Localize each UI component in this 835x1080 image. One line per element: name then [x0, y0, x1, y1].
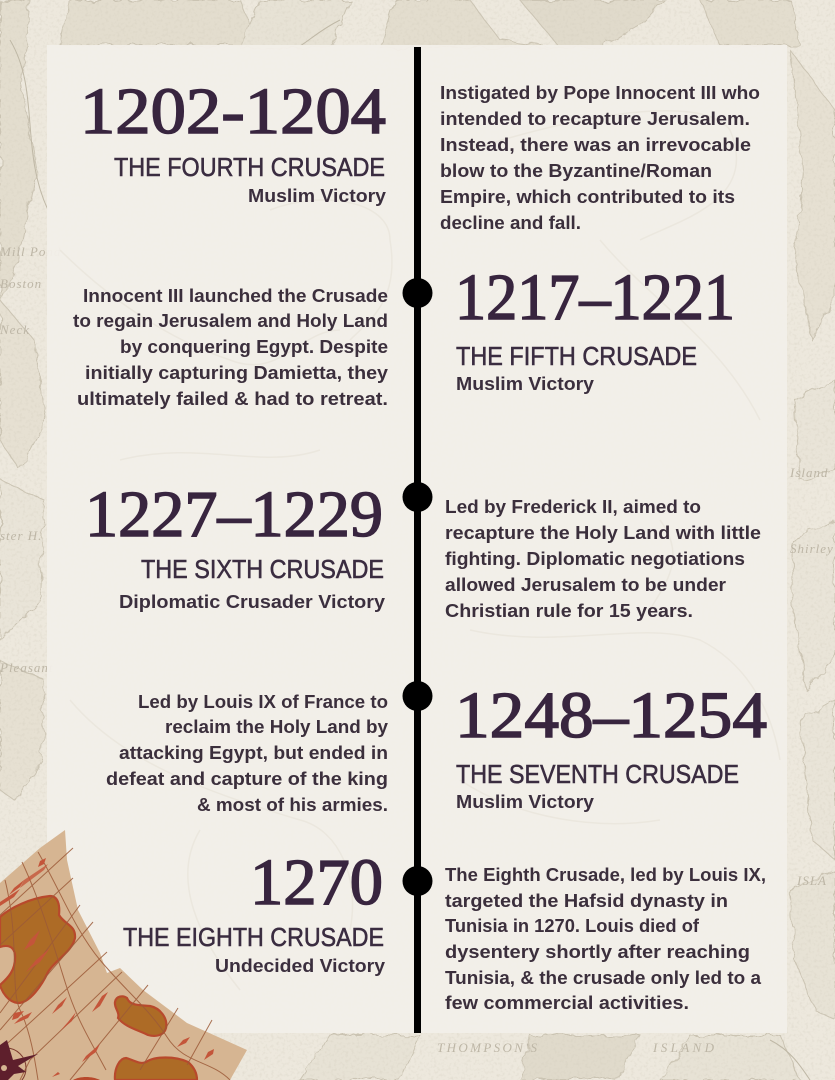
panel: eighth crusade heading [123, 846, 385, 976]
panel: sixth crusade heading [85, 478, 385, 612]
background: antique map: Island [789, 465, 828, 480]
text block: fourth crusade description: intended to recapture Jerusalem. [440, 109, 750, 129]
map landmass: lower island [115, 1058, 197, 1080]
text block: fifth crusade description: by conquering Egypt. Despite [120, 337, 388, 357]
map grid lines [0, 848, 230, 1080]
text block: eighth crusade description: targeted the Hafsid dynasty in [445, 891, 728, 911]
background: antique map: Boston [0, 276, 42, 291]
date: 1202-1204: 1202-1204 [80, 75, 386, 148]
text block: eighth crusade description [445, 865, 766, 1013]
outcome: diplomatic crusader victory: Diplomatic Crusader Victory [119, 592, 385, 612]
text block: fourth crusade description [440, 83, 760, 233]
text block: seventh crusade description [106, 692, 388, 815]
text block: sixth crusade description: recapture the Holy Land with little [445, 523, 761, 543]
text block: sixth crusade description: allowed Jerusalem to be under [445, 575, 726, 595]
text block: fifth crusade description: Innocent III launched the Crusade [83, 286, 388, 306]
text block: fourth crusade description: Instigated by Pope Innocent III who [440, 83, 760, 103]
text block: fourth crusade description: Instead, there was an irrevocable [440, 135, 751, 155]
outcome: muslim victory: Muslim Victory [456, 792, 594, 812]
heading: the fifth crusade: THE FIFTH CRUSADE [456, 341, 697, 371]
map landmass: large island [0, 896, 75, 1003]
text block: fifth crusade description: to regain Jerusalem and Holy Land [73, 311, 388, 331]
text block: eighth crusade description: The Eighth Crusade, led by Louis IX, [445, 865, 766, 885]
parchment sheet [0, 830, 247, 1080]
text block: fifth crusade description: ultimately failed & had to retreat. [77, 389, 388, 409]
date: 1227-1229: 1227–1229 [85, 478, 383, 551]
map red sea marks [0, 858, 214, 1077]
outcome: muslim victory: Muslim Victory [248, 186, 386, 206]
text block: fourth crusade description: blow to the Byzantine/Roman [440, 161, 712, 181]
text block: sixth crusade description: Led by Frederick II, aimed to [445, 497, 701, 517]
background: antique map: Neck [0, 322, 30, 337]
background: antique map: ster H. [0, 528, 42, 543]
background: antique map: ISLA [796, 873, 827, 888]
text block: eighth crusade description: Tunisia in 1270. Louis died of [445, 916, 700, 936]
text block: seventh crusade description: attacking Egypt, but ended in [119, 743, 388, 763]
panel: seventh crusade heading [455, 679, 767, 812]
text block: sixth crusade description: fighting. Diplomatic negotiations [445, 549, 745, 569]
text block: sixth crusade description: Christian rule for 15 years. [445, 601, 693, 621]
illustration: parchment map corner [0, 830, 247, 1080]
date: 1270: 1270 [250, 846, 383, 919]
date: 1248-1254: 1248–1254 [455, 679, 767, 752]
text block: fifth crusade description: initially capturing Damietta, they [85, 363, 388, 383]
heading: the eighth crusade: THE EIGHTH CRUSADE [123, 922, 384, 952]
background: antique map: ISLAND [652, 1040, 715, 1055]
timeline: vertical line with markers [402, 47, 432, 1033]
heading: the seventh crusade: THE SEVENTH CRUSADE [456, 759, 739, 789]
text block: fourth crusade description: decline and fall. [440, 213, 581, 233]
map landmass: small island [115, 996, 166, 1036]
outcome: muslim victory: Muslim Victory [456, 374, 594, 394]
panel: fifth crusade heading [455, 261, 735, 394]
text block: seventh crusade description: Led by Louis IX of France to [138, 692, 388, 712]
outcome: undecided victory: Undecided Victory [215, 956, 385, 976]
text block: eighth crusade description: few commercial activities. [445, 993, 689, 1013]
heading: the sixth crusade: THE SIXTH CRUSADE [141, 554, 384, 584]
background: antique map: Pleasant [0, 660, 54, 675]
icon: compass rose [0, 1040, 38, 1080]
heading: the fourth crusade: THE FOURTH CRUSADE [114, 152, 385, 182]
text block: seventh crusade description: & most of his armies. [197, 795, 388, 815]
text block: seventh crusade description: reclaim the Holy Land by [165, 717, 388, 737]
text block: eighth crusade description: dysentery shortly after reaching [445, 942, 750, 962]
panel: fourth crusade heading [80, 75, 386, 206]
background: antique map: THOMPSON'S [437, 1040, 538, 1055]
date: 1217-1221: 1217–1221 [455, 261, 735, 334]
map landmass: bottom sliver [73, 1077, 100, 1080]
text block: seventh crusade description: defeat and capture of the king [106, 769, 388, 789]
background: antique map: Mill Pond [0, 244, 61, 259]
text block: sixth crusade description [445, 497, 761, 621]
text block: fifth crusade description [73, 286, 388, 409]
text block: eighth crusade description: Tunisia, & the crusade only led to a [445, 968, 762, 988]
text block: fourth crusade description: Empire, which contributed to its [440, 187, 735, 207]
